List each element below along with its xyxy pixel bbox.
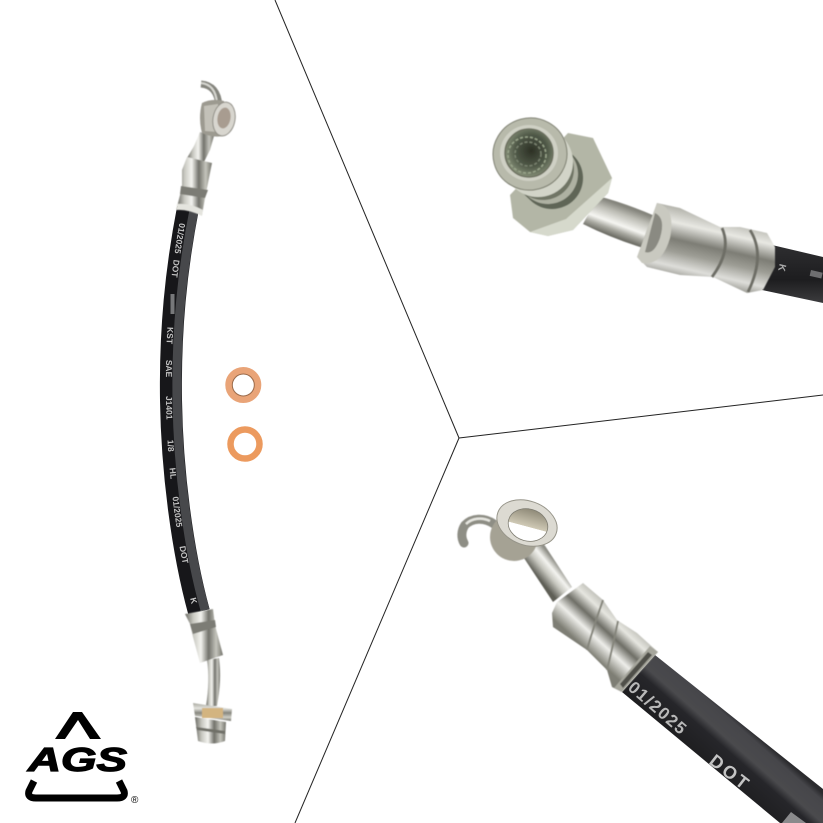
rubber hose with printed markings: J1401 — [166, 396, 172, 420]
rubber hose with printed markings: K — [190, 598, 198, 604]
logo top chevron — [55, 712, 101, 739]
close-up bore — [485, 110, 575, 198]
rubber hose with printed markings: DOT — [180, 546, 188, 563]
brass thread patch — [202, 708, 223, 718]
close-up hose — [622, 655, 823, 823]
close-up hose text: K — [775, 263, 788, 273]
close-up bar — [782, 812, 806, 823]
close-up tube — [583, 196, 655, 250]
rubber hose with printed markings: DOT — [172, 260, 180, 278]
rubber hose with printed markings — [160, 206, 210, 614]
close-up hose bar — [810, 270, 823, 279]
rubber hose with printed markings: KST — [166, 328, 174, 344]
close-up hook — [462, 519, 494, 543]
logo bottom bracket — [29, 781, 124, 798]
top banjo fitting — [176, 83, 238, 216]
registered mark: ® — [131, 795, 139, 806]
copper washers — [229, 370, 260, 458]
close-up hex nut — [510, 133, 612, 236]
rubber hose with printed markings: 1/8 — [168, 440, 174, 452]
close-up date code: 01/2025 — [624, 678, 691, 739]
close-up hose section — [762, 245, 823, 303]
logo wordmark: AGS — [27, 741, 127, 778]
detail: banjo fitting close-up — [462, 492, 823, 823]
close-up collar with thread grooves — [530, 154, 552, 178]
close-up ferrule — [637, 203, 775, 293]
close-up eye ring — [490, 492, 564, 554]
bottom flare nut fitting — [185, 609, 232, 744]
rubber hose with printed markings: HL — [170, 468, 176, 479]
close-up DOT mark: DOT — [706, 750, 755, 795]
divider lines — [275, 0, 823, 823]
rubber hose with printed markings: SAE — [166, 360, 172, 377]
full brake hose assembly — [160, 80, 236, 744]
detail: flare nut close-up — [485, 110, 823, 303]
close-up eye body — [490, 513, 538, 561]
rubber hose with printed markings: 01/2025 — [172, 496, 182, 528]
AGS logo — [27, 712, 139, 806]
rubber hose with printed markings: 01/2025 — [174, 224, 185, 254]
close-up ferrule — [552, 583, 658, 692]
close-up eye hole — [505, 504, 551, 546]
close-up tube — [520, 538, 572, 602]
